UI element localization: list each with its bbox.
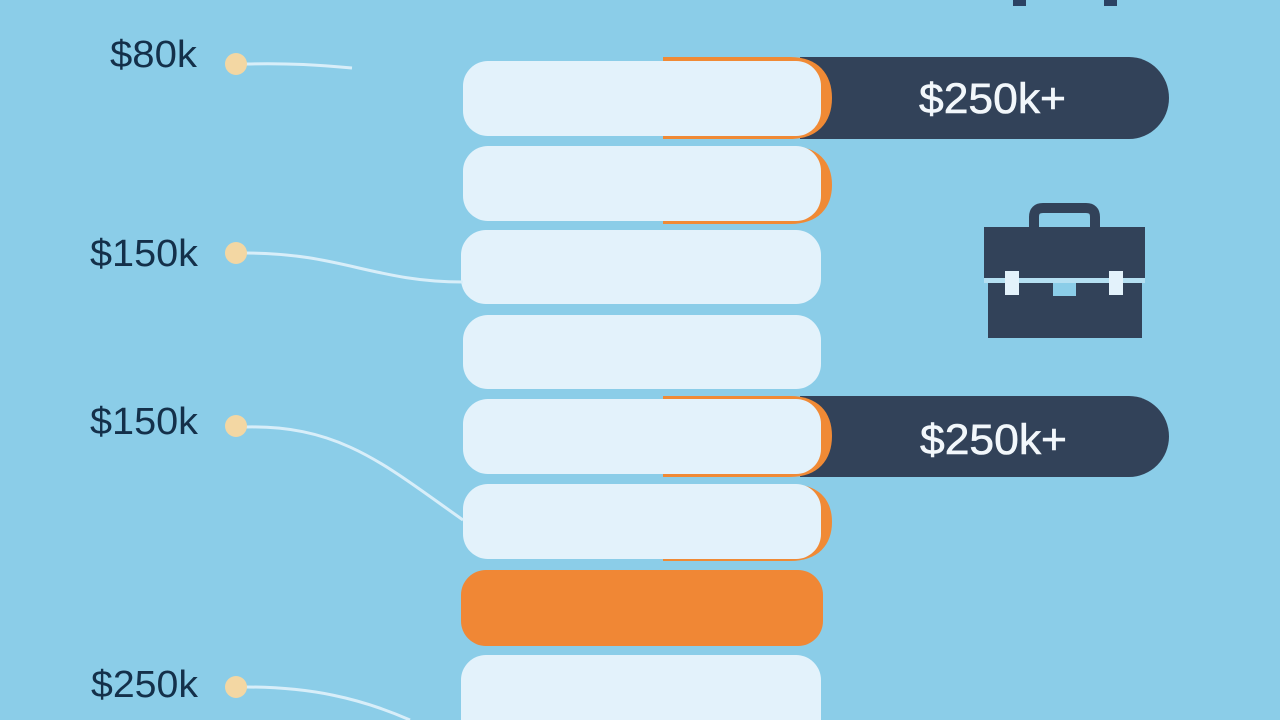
- label row: $150k (second): $150k: [90, 401, 199, 443]
- label row: $80k: $80k: [110, 34, 198, 76]
- bar 6: [463, 484, 821, 559]
- label row: $150k (second): [90, 401, 463, 520]
- bar 5: [463, 399, 821, 474]
- cropped heading letter fragments: [1013, 0, 1117, 6]
- bar 2: [463, 146, 821, 221]
- label row: $80k: [110, 34, 352, 76]
- stack of salary bars: [461, 61, 823, 720]
- bar 7: highlighted orange: [461, 570, 823, 646]
- dark salary bar 1: [800, 57, 1169, 139]
- label row: $250k: [91, 664, 410, 720]
- icon: briefcase: [984, 208, 1145, 338]
- bar 1: [463, 61, 821, 136]
- salary value: $250k+ (second): $250k+: [920, 416, 1067, 464]
- label row: $250k: $250k: [91, 664, 199, 706]
- orange accents behind bars: [663, 57, 832, 561]
- salary value: $250k+: $250k+: [919, 75, 1066, 123]
- bar 8: [461, 655, 821, 720]
- label row: $150k: [90, 233, 463, 282]
- label row: $150k: $150k: [90, 233, 199, 275]
- dark salary bar 2: [800, 396, 1169, 477]
- bar 3: [461, 230, 821, 304]
- bar 4: [463, 315, 821, 389]
